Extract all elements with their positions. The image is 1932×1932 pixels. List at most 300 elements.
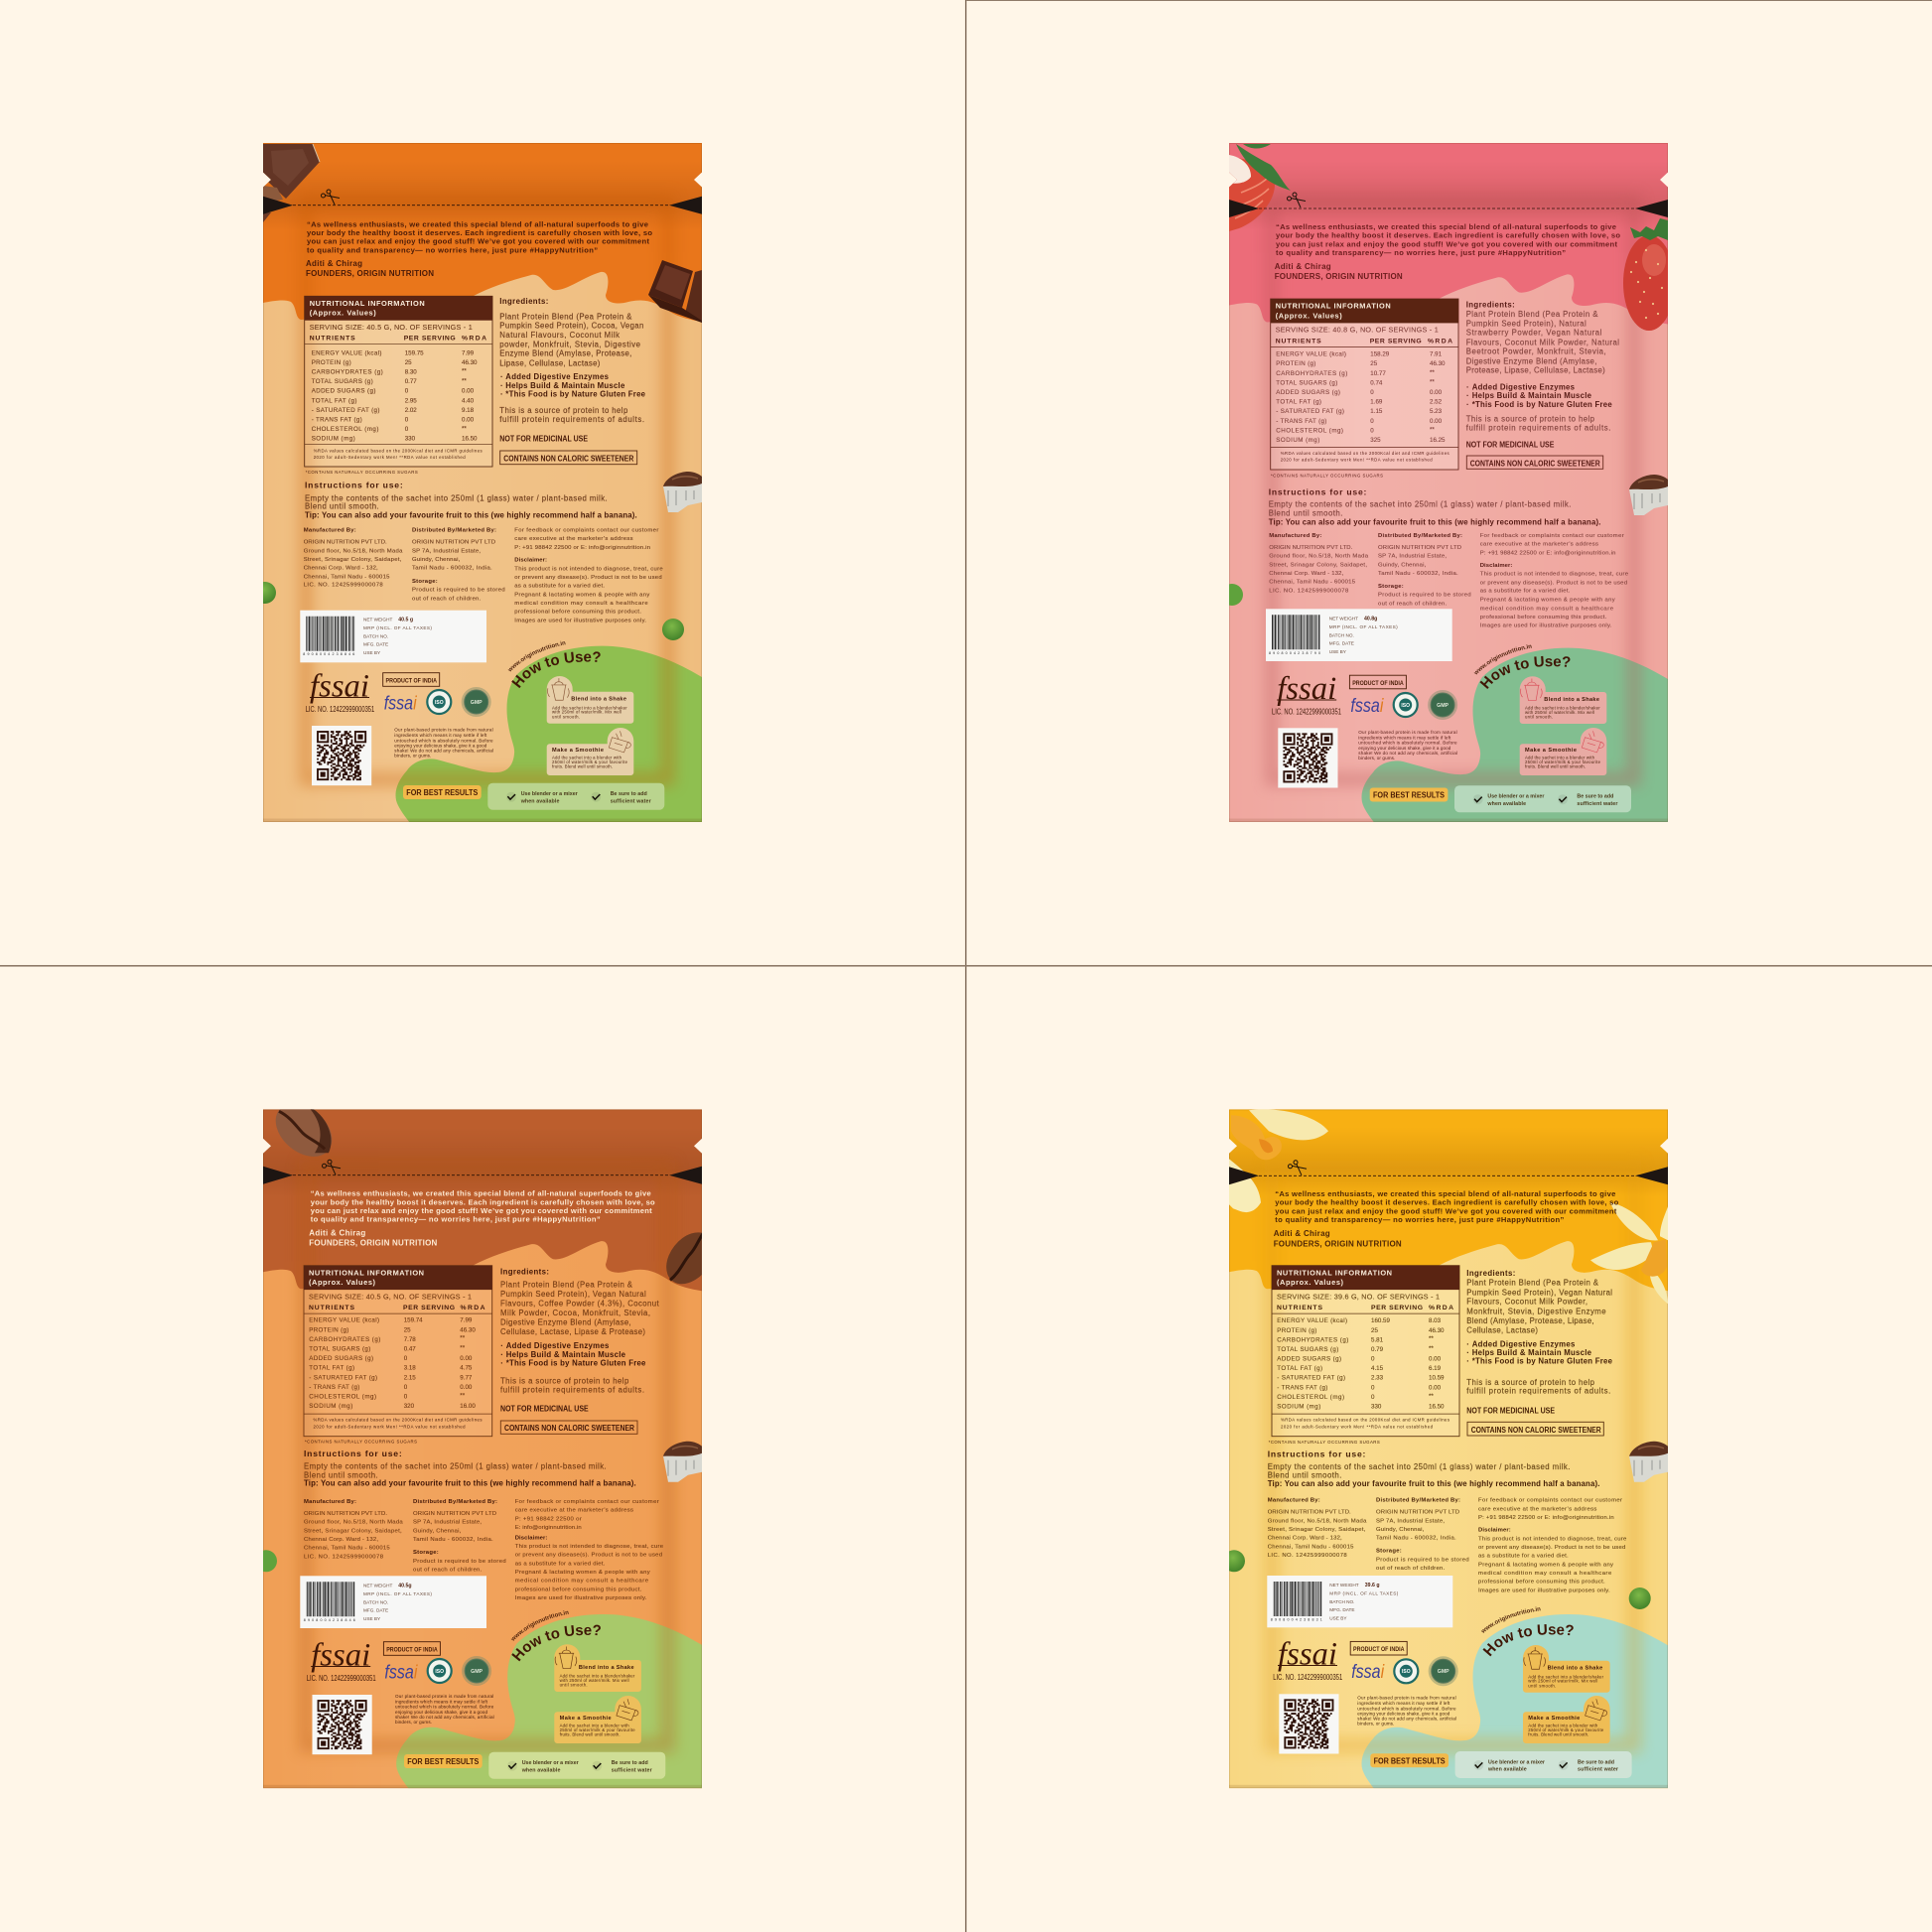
plant protein note: [1358, 730, 1457, 760]
distributor and storage: Storage:: [412, 579, 438, 585]
table rows: 0.74: [1370, 379, 1383, 386]
manufacturer: [304, 527, 403, 589]
barcode label: 8908004238790: [1269, 651, 1320, 655]
feedback and disclaimer: For feedback or complaints contact our customer: [515, 1499, 659, 1505]
table rows: **: [1429, 1335, 1434, 1342]
for best results bar: when available: [1487, 1767, 1527, 1773]
barcode label: 8908004238846: [304, 1618, 355, 1622]
ingredients: This is a source of protein to help: [499, 406, 628, 415]
distributor and storage: Distributed By/Marketed By:: [412, 527, 496, 533]
table rows: 0.00: [460, 1355, 473, 1362]
illustration: coconut chocolate piece: [663, 1442, 702, 1482]
distributor and storage: out of reach of children.: [1376, 1566, 1446, 1572]
feedback and disclaimer: care executive at the marketer’s address: [1478, 1506, 1596, 1512]
card: make a smoothie: Add the sachet into a blender with: [552, 756, 622, 760]
table rows: 0.00: [1430, 389, 1443, 396]
nutrition table: 2020 for adult-Sedentary work Men! **RDA value not established: [1281, 1424, 1434, 1429]
barcode label: 40.5g: [398, 1583, 412, 1588]
table rows: ADDED SUGARS (g): [1277, 1356, 1341, 1363]
feedback and disclaimer: as a substitute for a varied diet.: [1478, 1554, 1569, 1560]
ingredients: Cellulase, Lactase): [1466, 1325, 1538, 1334]
table rows: 325: [1370, 437, 1381, 444]
ingredients: ·: [500, 381, 503, 390]
QR code: [312, 1695, 372, 1754]
table rows: 0.77: [405, 378, 417, 385]
for best results bar: [403, 783, 664, 810]
ingredients: Flavours, Coconut Milk Powder,: [1466, 1298, 1587, 1307]
feedback and disclaimer: care executive at the marketer’s address: [515, 1508, 633, 1514]
ingredients: Added Digestive Enzymes: [505, 372, 610, 381]
feedback and disclaimer: P: +91 98842 22500 or E: info@originnutrition.in: [1478, 1515, 1614, 1521]
logo: fssai: fssai: [1278, 1637, 1337, 1673]
feedback and disclaimer: Pregnant & lactating women & people with any: [515, 1570, 650, 1576]
card: blend into a shake: with 250ml of water/milk. Mix well: [1525, 710, 1594, 715]
ingredients: [500, 1268, 660, 1414]
feedback and disclaimer: [515, 1499, 664, 1601]
for best results bar: [404, 1752, 665, 1779]
manufacturer: Manufactured By:: [1269, 533, 1321, 539]
table rows: TOTAL SUGARS (g): [309, 1346, 370, 1353]
nutrition table: 2020 for adult-Sedentary work Men! **RDA value not established: [314, 1424, 466, 1429]
product of india: [383, 673, 440, 686]
card: make a smoothie: fruits. Blend well until smooth.: [552, 764, 613, 769]
feedback and disclaimer: P: +91 98842 22500 or: [515, 1516, 582, 1522]
ingredients: Helps Build & Maintain Muscle: [506, 1350, 626, 1359]
ingredients: ·: [1466, 1348, 1469, 1357]
card: blend into a shake: until smooth.: [552, 714, 580, 719]
ingredients: Monkfruit, Stevia, Digestive Enzyme: [1466, 1307, 1606, 1315]
illustration: pea: [263, 1550, 277, 1573]
barcode label: MRP (INCL. OF ALL TAXES): [1329, 1591, 1399, 1596]
nutrition table: %RDA values calculated based on the 2000Kcal diet and ICMR guidelines: [314, 448, 483, 453]
ingredients: [499, 297, 646, 443]
table rows: **: [462, 367, 467, 374]
table rows: PROTEIN (g): [1276, 360, 1315, 367]
table rows: ENERGY VALUE (kcal): [309, 1317, 379, 1324]
nutrition table: PER SERVING: [404, 336, 456, 343]
ingredients: powder, Monkfruit, Stevia, Digestive: [499, 340, 640, 348]
nutrition table: %RDA: [1429, 1305, 1453, 1311]
nutrition table: (Approx. Values): [310, 309, 376, 318]
barcode label: BATCH NO.: [363, 634, 388, 639]
founders quote: you can just relax and enjoy the good stuff! We’ve got you covered with our commitment: [1276, 239, 1617, 248]
feedback and disclaimer: as a substitute for a varied diet.: [514, 584, 605, 590]
card: blend into a shake: Add the sachet into a blender/shaker: [560, 1674, 635, 1679]
table rows: 7.78: [404, 1336, 416, 1343]
table rows: - SATURATED FAT (g): [312, 407, 379, 414]
barcode label: MRP (INCL. OF ALL TAXES): [363, 625, 432, 630]
feedback and disclaimer: This product is not intended to diagnose, treat, cure: [1480, 572, 1629, 578]
ingredients: Plant Protein Blend (Pea Protein &: [1466, 310, 1598, 319]
nutrition table: %RDA: [461, 1305, 485, 1311]
ingredients: Plant Protein Blend (Pea Protein &: [1466, 1279, 1599, 1288]
card: make a smoothie: 250ml of water/milk & your favourite: [1525, 759, 1601, 764]
table rows: SODIUM (mg): [312, 436, 355, 443]
instructions: [305, 481, 637, 520]
ingredients: Protease, Lipase, Cellulase, Lactase): [1466, 366, 1605, 375]
sweetener box: [1466, 456, 1603, 469]
icon: scissors: [322, 190, 340, 205]
barcode label: 40.5 g: [398, 618, 413, 623]
ingredients: Pumpkin Seed Protein), Natural: [1466, 319, 1587, 328]
card: blend into a shake: Blend into a Shake: [571, 697, 626, 703]
table rows: CARBOHYDRATES (g): [1277, 1336, 1348, 1343]
for best results bar: sufficient water: [612, 1767, 652, 1773]
card: make a smoothie: Make a Smoothie: [1528, 1716, 1580, 1722]
ingredients: Digestive Enzyme Blend (Amylase,: [1466, 356, 1596, 365]
nutrition table: SERVING SIZE: 40.8 G, NO. OF SERVINGS - 1: [1276, 326, 1439, 335]
feedback and disclaimer: This product is not intended to diagnose, treat, cure: [1478, 1536, 1627, 1542]
nutrition table: [1271, 299, 1458, 470]
instructions: Empty the contents of the sachet into 250ml (1 glass) water / plant-based milk.: [304, 1462, 607, 1471]
certification logos: [1273, 1637, 1458, 1686]
table rows: 10.59: [1429, 1375, 1445, 1382]
table rows: 9.77: [460, 1374, 473, 1381]
instructions: Empty the contents of the sachet into 250ml (1 glass) water / plant-based milk.: [1268, 1462, 1570, 1471]
distributor and storage: Guindy, Chennai,: [1378, 562, 1427, 568]
instructions: Blend until smooth.: [305, 502, 379, 511]
manufacturer: Street, Srinagar Colony, Saidapet,: [1268, 1527, 1366, 1533]
table rows: 0: [1370, 418, 1374, 425]
for best results bar: FOR BEST RESULTS: [407, 1757, 480, 1766]
instructions: Instructions for use:: [304, 1449, 402, 1458]
table rows: 2.52: [1430, 399, 1443, 406]
ingredients: Ingredients:: [499, 297, 548, 306]
table rows: ADDED SUGARS (g): [312, 388, 375, 395]
logo: fssai: [306, 669, 375, 714]
barcode label: [300, 611, 486, 662]
manufacturer: LIC. NO. 12425999000078: [304, 583, 383, 589]
nutrition table: NUTRITIONAL INFORMATION: [310, 299, 425, 308]
instructions: Blend until smooth.: [1269, 508, 1342, 517]
table rows: 0: [405, 417, 409, 423]
nutrition table: %RDA values calculated based on the 2000Kcal diet and ICMR guidelines: [1281, 451, 1449, 456]
table rows: 3.18: [404, 1365, 416, 1372]
nutrition table: NUTRITIONAL INFORMATION: [1277, 1268, 1392, 1277]
feedback and disclaimer: medical condition may consult a healthcare: [514, 601, 648, 607]
table rows: TOTAL SUGARS (g): [312, 378, 373, 385]
manufacturer: Manufactured By:: [304, 527, 356, 533]
logo: fssai: fssai: [1277, 671, 1336, 707]
badges: [1394, 690, 1457, 720]
feedback and disclaimer: as a substitute for a varied diet.: [1480, 589, 1571, 595]
barcode label: 8908004238846: [303, 652, 354, 656]
for best results bar: FOR BEST RESULTS: [1373, 790, 1446, 800]
card: make a smoothie: Make a Smoothie: [552, 748, 604, 754]
founders quote: Aditi & Chirag: [1274, 1229, 1330, 1238]
feedback and disclaimer: medical condition may consult a healthcare: [1478, 1571, 1612, 1577]
distributor and storage: [413, 1499, 506, 1574]
feedback and disclaimer: For feedback or complaints contact our customer: [514, 527, 658, 533]
certification logos: [307, 1638, 491, 1686]
founders quote: to quality and transparency— no worries here, just pure #HappyNutrition”: [311, 1215, 601, 1224]
distributor and storage: SP 7A, Industrial Estate,: [1378, 554, 1447, 560]
distributor and storage: Storage:: [1376, 1549, 1402, 1555]
instructions: [304, 1449, 636, 1488]
illustration: pea: [1229, 584, 1243, 606]
illustration: coffee beans: [265, 1093, 724, 1293]
feedback and disclaimer: This product is not intended to diagnose, treat, cure: [514, 566, 663, 572]
instructions: Tip: You can also add your favourite fruit to this (we highly recommend half a banana).: [304, 1479, 636, 1488]
table rows: **: [462, 425, 467, 432]
table rows: 4.75: [460, 1365, 473, 1372]
manufacturer: LIC. NO. 12425999000078: [1268, 1553, 1347, 1559]
table rows: 46.30: [1430, 360, 1446, 367]
table rows: ENERGY VALUE (kcal): [1276, 351, 1346, 357]
barcode label: MFG. DATE: [1329, 640, 1354, 645]
distributor and storage: Tamil Nadu - 600032, India.: [1376, 1536, 1456, 1542]
QR code: [312, 726, 371, 785]
founders quote: your body the healthy boost it deserves. Each ingredient is carefully chosen with love, so: [307, 228, 652, 237]
barcode label: 8908004238831: [1271, 1618, 1322, 1622]
manufacturer: Street, Srinagar Colony, Saidapet,: [1269, 562, 1367, 568]
ingredients: Flavours, Coconut Milk Powder, Natural: [1466, 338, 1619, 346]
feedback and disclaimer: Pregnant & lactating women & people with any: [514, 592, 649, 598]
logo: fssai: LIC. NO. 12422999000351: [1273, 1673, 1343, 1682]
table rows: 2.15: [404, 1374, 416, 1381]
table rows: PROTEIN (g): [309, 1326, 348, 1333]
manufacturer: Street, Srinagar Colony, Saidapet,: [304, 557, 402, 563]
logo: fssai: LIC. NO. 12422999000351: [1272, 707, 1341, 717]
table rows: 0: [404, 1394, 408, 1401]
icon: scissors: [1287, 193, 1306, 207]
panel: coffee pouch: [263, 1109, 702, 1789]
card: make a smoothie: fruits. Blend well until smooth.: [1525, 764, 1586, 769]
nutrition table: SERVING SIZE: 40.5 G, NO. OF SERVINGS - 1: [309, 1292, 472, 1301]
table rows: CHOLESTEROL (mg): [1277, 1394, 1344, 1401]
ingredients: Ingredients:: [1466, 300, 1515, 309]
barcode label: MFG. DATE: [363, 1607, 388, 1612]
table rows: CARBOHYDRATES (g): [1276, 370, 1347, 377]
table rows: TOTAL FAT (g): [1277, 1365, 1322, 1372]
illustration: coconut chocolate piece: [1629, 1442, 1668, 1482]
nutrition table: 2020 for adult-Sedentary work Men! **RDA value not established: [314, 455, 466, 460]
plant protein note: Our plant-based protein is made from natural: [1357, 1696, 1456, 1701]
table rows: 320: [404, 1403, 415, 1410]
ingredients: This is a source of protein to help: [1466, 1378, 1595, 1387]
distributor and storage: Product is required to be stored: [1376, 1557, 1469, 1563]
how to use heading: [1481, 1606, 1574, 1656]
logo: fssai: fssai: [310, 669, 369, 705]
illustration: peas: [254, 582, 684, 640]
feedback and disclaimer: Disclaimer:: [515, 1535, 547, 1541]
distributor and storage: Product is required to be stored: [413, 1559, 506, 1565]
ingredients: *This Food is by Nature Gluten Free: [505, 390, 646, 399]
table rows: 0.00: [462, 388, 475, 395]
ingredients: Added Digestive Enzymes: [1472, 382, 1576, 391]
card: make a smoothie: 250ml of water/milk & your favourite: [560, 1727, 635, 1732]
table rows: 9.18: [462, 407, 475, 414]
founders quote: Aditi & Chirag: [306, 259, 362, 268]
founders quote: “As wellness enthusiasts, we created this special blend of all-natural superfoods to give: [311, 1189, 651, 1198]
illustration: peas: [1223, 1550, 1651, 1609]
logo: fssai: LIC. NO. 12422999000351: [306, 705, 375, 714]
barcode label: NET WEIGHT: [1329, 1583, 1359, 1587]
for best results bar: Use blender or a mixer: [1487, 794, 1544, 800]
table rows: 5.81: [1371, 1336, 1384, 1343]
table rows: TOTAL SUGARS (g): [1276, 379, 1337, 386]
feedback and disclaimer: E: info@originnutrition.in: [515, 1525, 582, 1531]
feedback and disclaimer: medical condition may consult a healthcare: [1480, 606, 1614, 612]
ingredients: Pumpkin Seed Protein), Vegan Natural: [500, 1290, 646, 1299]
for best results bar: when available: [520, 798, 559, 804]
barcode label: MFG. DATE: [363, 642, 388, 647]
table rows: [309, 1317, 476, 1410]
manufacturer: ORIGIN NUTRITION PVT LTD.: [1269, 545, 1353, 551]
table rows: 46.30: [462, 359, 478, 366]
manufacturer: [1269, 533, 1369, 594]
how to use heading: www.originnutrition.in: [508, 641, 566, 671]
table rows: 25: [1370, 360, 1378, 367]
ingredients: Ingredients:: [500, 1268, 549, 1277]
for best results bar: [1370, 785, 1631, 812]
distributor and storage: out of reach of children.: [412, 596, 482, 602]
founders quote: “As wellness enthusiasts, we created this special blend of all-natural superfoods to give: [307, 219, 648, 228]
pouch body: [1221, 143, 1675, 830]
ingredients: ·: [1466, 391, 1469, 400]
ingredients: fulfill protein requirements of adults.: [499, 415, 644, 424]
nutrition table: (Approx. Values): [1277, 1278, 1344, 1287]
plant protein note: [394, 728, 493, 759]
ingredients: Added Digestive Enzymes: [1472, 1339, 1576, 1348]
ingredients: Helps Build & Maintain Muscle: [1472, 1348, 1592, 1357]
table rows: 0.47: [404, 1346, 416, 1353]
feedback and disclaimer: Disclaimer:: [1478, 1528, 1511, 1534]
plant protein note: ingredients which means it may settle if left: [394, 733, 487, 738]
logo: fssai: [1272, 671, 1341, 717]
founders quote: “As wellness enthusiasts, we created this special blend of all-natural superfoods to give: [1276, 222, 1616, 231]
ingredients: Cellulase, Lactase, Lipase & Protease): [500, 1327, 645, 1336]
nutrition table: NUTRIENTS: [310, 336, 355, 343]
instructions: Tip: You can also add your favourite fruit to this (we highly recommend half a banana).: [305, 511, 637, 520]
small fssai: fssai: [1350, 696, 1384, 717]
sugars note: *CONTAINS NATURALLY OCCURRING SUGARS: [306, 470, 418, 475]
instructions: Tip: You can also add your favourite fruit to this (we highly recommend half a banana).: [1269, 517, 1600, 526]
manufacturer: LIC. NO. 12425999000078: [304, 1554, 384, 1560]
feedback and disclaimer: [1480, 533, 1629, 629]
plant protein note: shake! We do not add any chemicals, artificial: [394, 749, 493, 754]
tear line with notches: [263, 197, 702, 214]
table rows: 0: [405, 388, 409, 395]
founders quote: Aditi & Chirag: [1275, 262, 1331, 271]
tear line with notches: [1229, 200, 1668, 217]
ingredients: ·: [1466, 382, 1469, 391]
table rows: ADDED SUGARS (g): [1276, 389, 1340, 396]
founders quote: “As wellness enthusiasts, we created this special blend of all-natural superfoods to give: [1275, 1189, 1615, 1198]
nutrition table: PER SERVING: [1371, 1305, 1423, 1311]
plant protein note: Our plant-based protein is made from natural: [394, 728, 493, 733]
distributor and storage: Storage:: [1378, 584, 1404, 590]
panel: strawberry pouch: [1229, 143, 1668, 822]
card: blend into a shake: [547, 676, 633, 724]
for best results bar: when available: [521, 1767, 560, 1773]
manufacturer: Chennai Corp. Ward - 132,: [304, 1537, 378, 1543]
nutrition table: PER SERVING: [403, 1305, 455, 1311]
table rows: 5.23: [1430, 408, 1443, 415]
table rows: 4.15: [1371, 1365, 1384, 1372]
plant protein note: ingredients which means it may settle if left: [395, 1699, 488, 1704]
ingredients: Digestive Enzyme Blend (Amylase,: [500, 1318, 631, 1327]
nutrition table: NUTRITIONAL INFORMATION: [309, 1268, 424, 1277]
for best results bar: Use blender or a mixer: [1488, 1759, 1545, 1765]
distributor and storage: Product is required to be stored: [412, 588, 505, 594]
barcode label: NET WEIGHT: [363, 1583, 392, 1587]
card: make a smoothie: Make a Smoothie: [560, 1716, 612, 1722]
table rows: CHOLESTEROL (mg): [309, 1394, 376, 1401]
table rows: - TRANS FAT (g): [1276, 418, 1326, 425]
how to use heading: How to Use?: [1479, 655, 1571, 689]
distributor and storage: Tamil Nadu - 600032, India.: [413, 1537, 493, 1543]
plant protein note: binders, or gums.: [394, 754, 431, 759]
table rows: **: [1429, 1345, 1434, 1352]
feedback and disclaimer: professional before consuming this product.: [1478, 1580, 1605, 1586]
panel: vanilla pouch: [1229, 1109, 1668, 1789]
table rows: 46.30: [1429, 1327, 1445, 1334]
founders quote: [306, 219, 652, 278]
table rows: SODIUM (mg): [1277, 1404, 1320, 1411]
table rows: TOTAL FAT (g): [312, 397, 356, 404]
nutrition table: (Approx. Values): [1276, 311, 1342, 320]
manufacturer: Chennai, Tamil Nadu - 600015: [304, 1546, 390, 1552]
card: blend into a shake: [554, 1644, 641, 1692]
card: blend into a shake: [1520, 676, 1606, 724]
table rows: 330: [1371, 1404, 1382, 1411]
nutrition table: NUTRIENTS: [309, 1305, 354, 1311]
founders quote: Aditi & Chirag: [309, 1229, 365, 1238]
distributor and storage: out of reach of children.: [1378, 601, 1448, 607]
distributor and storage: ORIGIN NUTRITION PVT LTD: [1376, 1510, 1459, 1516]
table rows: **: [1429, 1393, 1434, 1400]
distributor and storage: Distributed By/Marketed By:: [413, 1499, 497, 1505]
small fssai: fssai: [1351, 1662, 1385, 1683]
table rows: 16.50: [462, 436, 478, 443]
distributor and storage: Guindy, Chennai,: [1376, 1527, 1425, 1533]
logo: fssai: [307, 1638, 376, 1683]
ingredients: *This Food is by Nature Gluten Free: [506, 1358, 646, 1367]
table rows: 1.69: [1370, 399, 1383, 406]
ingredients: fulfill protein requirements of adults.: [500, 1385, 644, 1394]
ingredients: Beetroot Powder, Monkfruit, Stevia,: [1466, 347, 1606, 356]
table rows: - TRANS FAT (g): [309, 1384, 359, 1391]
QR code: [1279, 1694, 1338, 1753]
feedback and disclaimer: professional before consuming this product.: [514, 610, 641, 616]
distributor and storage: Guindy, Chennai,: [413, 1528, 462, 1534]
nutrition table: NUTRITIONAL INFORMATION: [1276, 302, 1391, 311]
ingredients: NOT FOR MEDICINAL USE: [1466, 440, 1554, 449]
ingredients: *This Food is by Nature Gluten Free: [1472, 1357, 1613, 1366]
card: make a smoothie: [554, 1696, 641, 1743]
table rows: **: [1430, 427, 1435, 433]
table rows: [1277, 1317, 1445, 1411]
how to use heading: www.originnutrition.in: [1473, 644, 1532, 675]
ingredients: ·: [500, 1341, 503, 1350]
distributor and storage: ORIGIN NUTRITION PVT LTD: [1378, 545, 1461, 551]
manufacturer: ORIGIN NUTRITION PVT LTD.: [1268, 1510, 1351, 1516]
nutrition table: %RDA values calculated based on the 2000Kcal diet and ICMR guidelines: [314, 1418, 482, 1423]
distributor and storage: Guindy, Chennai,: [412, 557, 461, 563]
table rows: 159.74: [404, 1317, 423, 1324]
nutrition table: %RDA: [1428, 338, 1452, 345]
plant protein note: enjoying your delicious shake, give it a good: [1358, 746, 1451, 751]
table rows: 0: [1370, 427, 1374, 434]
ingredients: Natural Flavours, Coconut Milk: [499, 331, 620, 340]
sugars note: *CONTAINS NATURALLY OCCURRING SUGARS: [1269, 1440, 1380, 1445]
card: blend into a shake: until smooth.: [1528, 1683, 1556, 1688]
table rows: 2.02: [405, 407, 417, 414]
card: blend into a shake: Blend into a Shake: [1544, 697, 1599, 703]
founders quote: to quality and transparency— no worries here, just pure #HappyNutrition”: [1276, 248, 1566, 257]
table rows: **: [460, 1393, 466, 1400]
